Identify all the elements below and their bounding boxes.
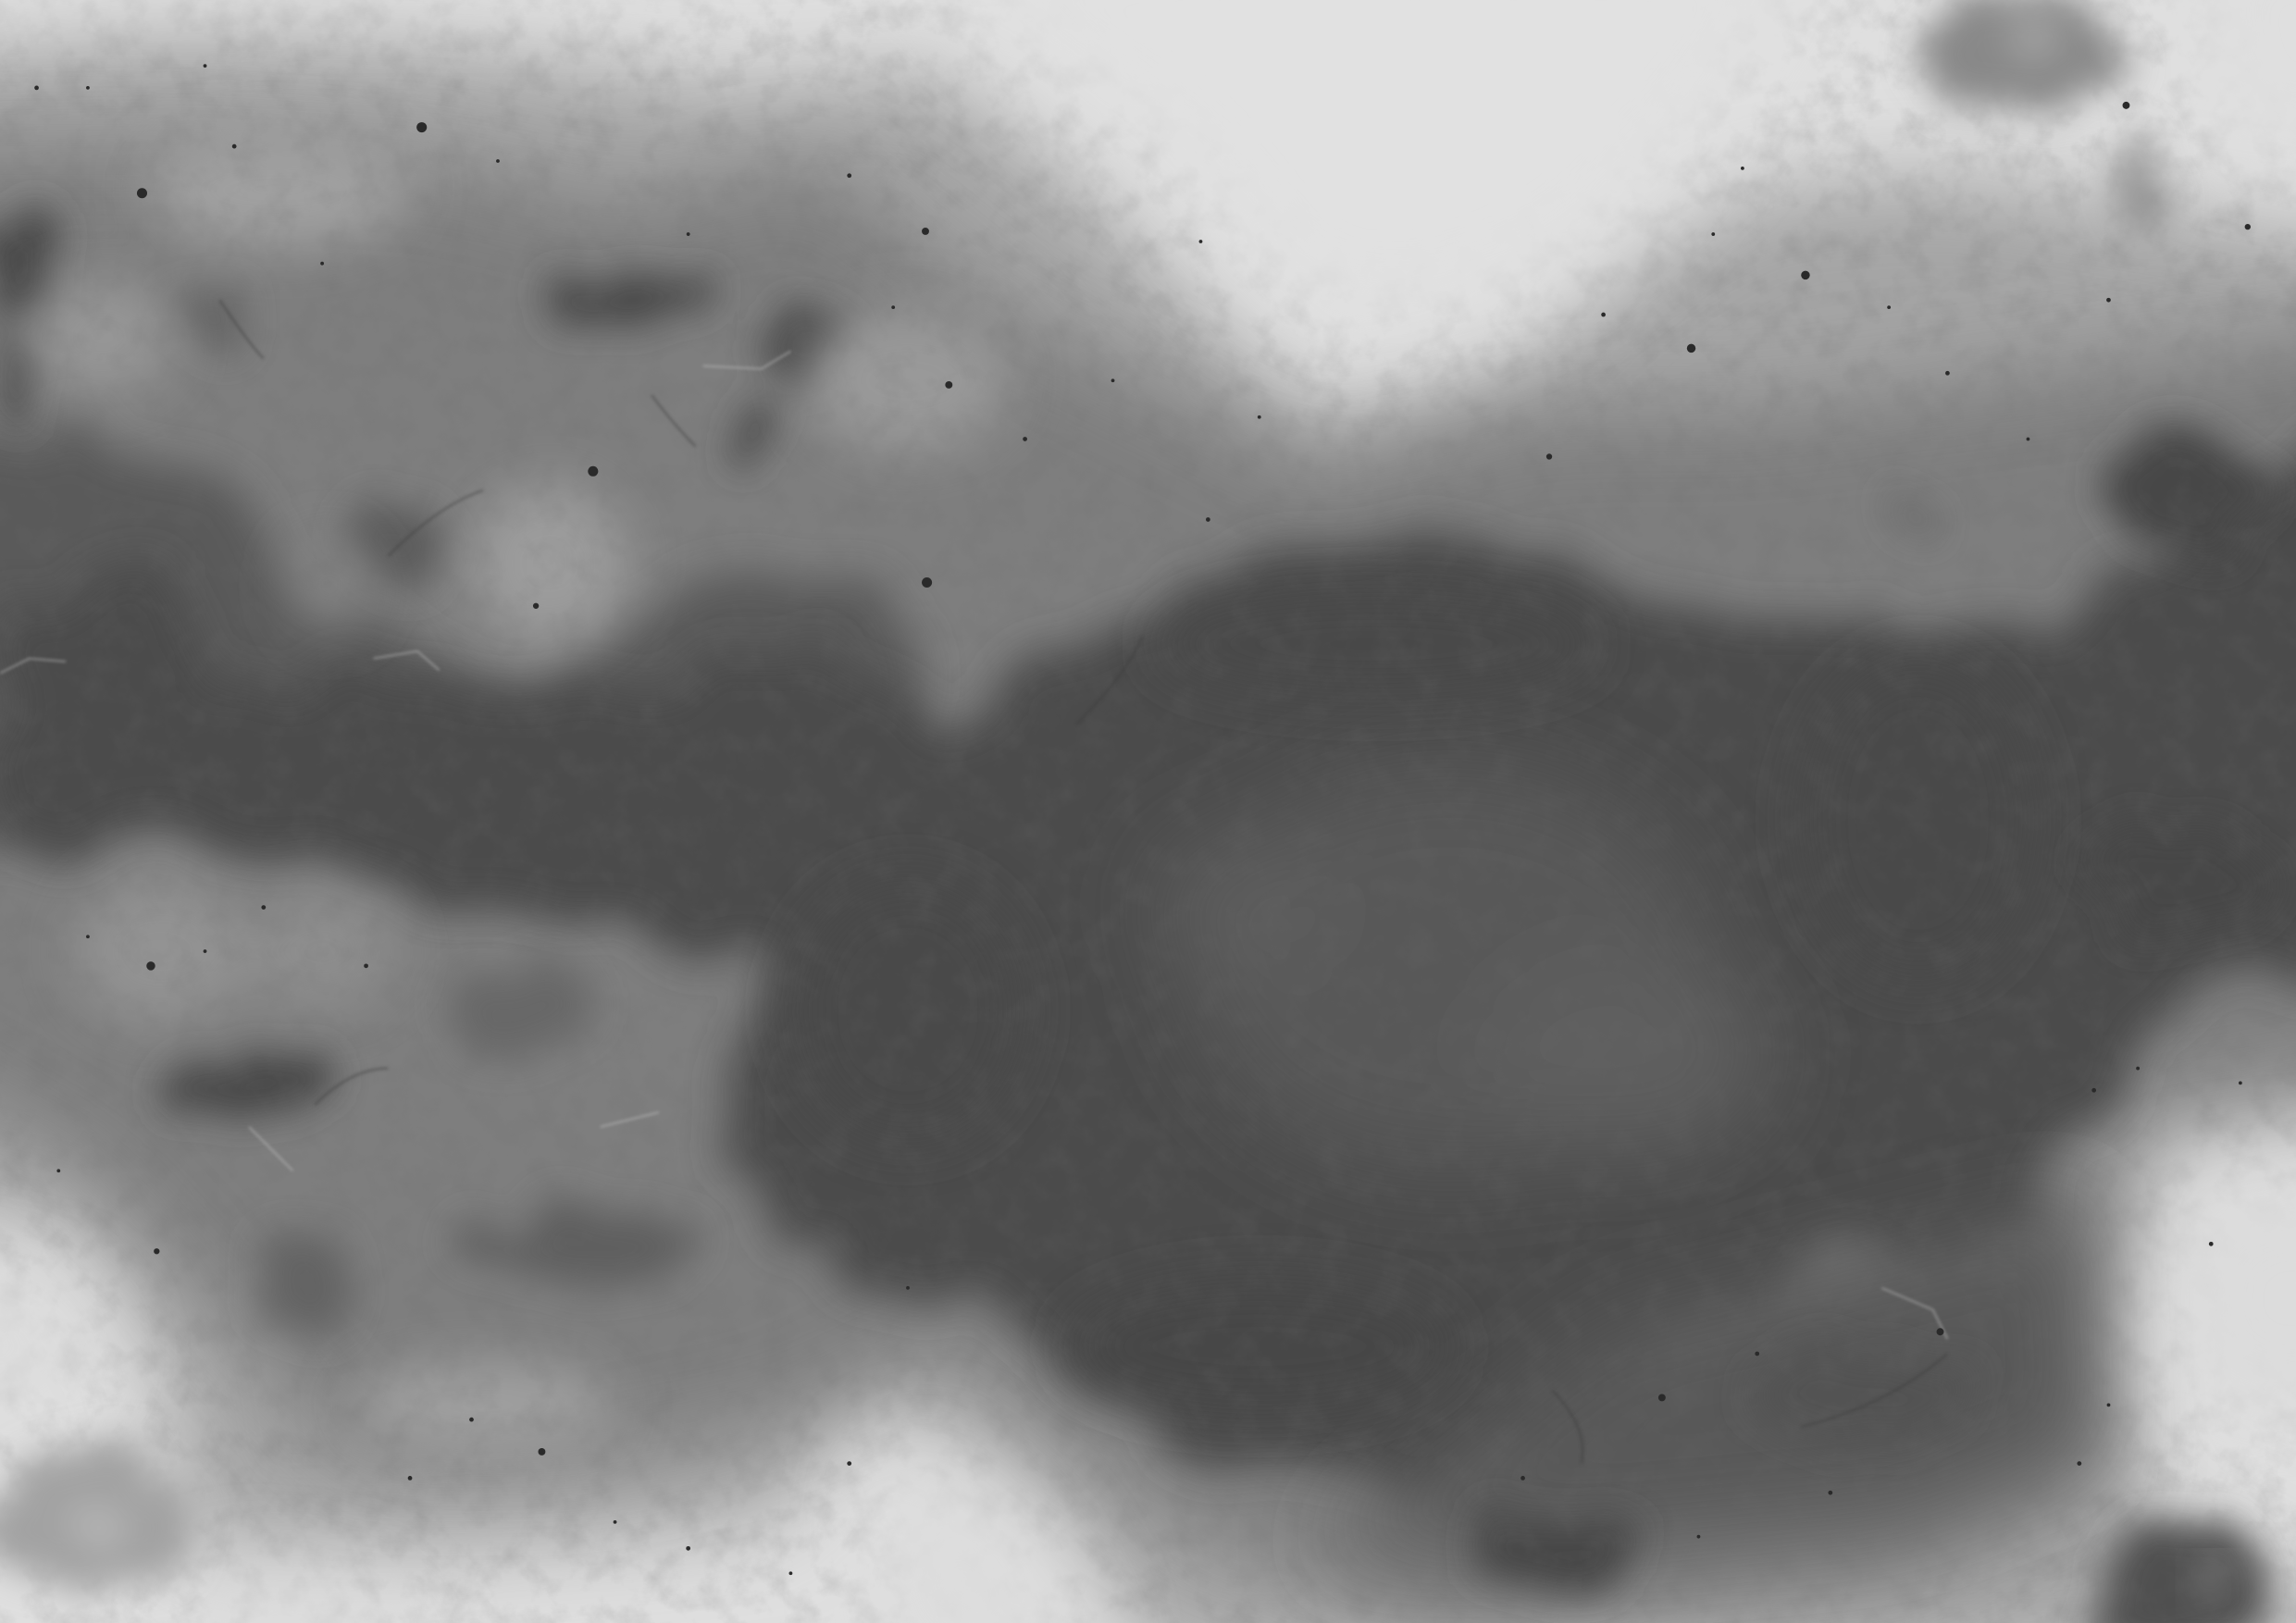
spiral cloud, bottom right (2196, 1567, 2231, 1600)
lighter glow in central dark mass (1157, 761, 1772, 1171)
dark lower right shoulder (1318, 1200, 2094, 1552)
dark left column and upper left shadow (0, 425, 937, 908)
spiral cloud, bottom left (0, 1443, 188, 1601)
dark core patches inside the mass (790, 593, 2035, 1412)
pale filaments (0, 352, 1947, 1339)
lighter nebula patches (30, 131, 1011, 1449)
thin filaments (219, 300, 1947, 1464)
central dark mass (0, 410, 2296, 1493)
spiral cloud, top right (1914, 0, 2158, 215)
